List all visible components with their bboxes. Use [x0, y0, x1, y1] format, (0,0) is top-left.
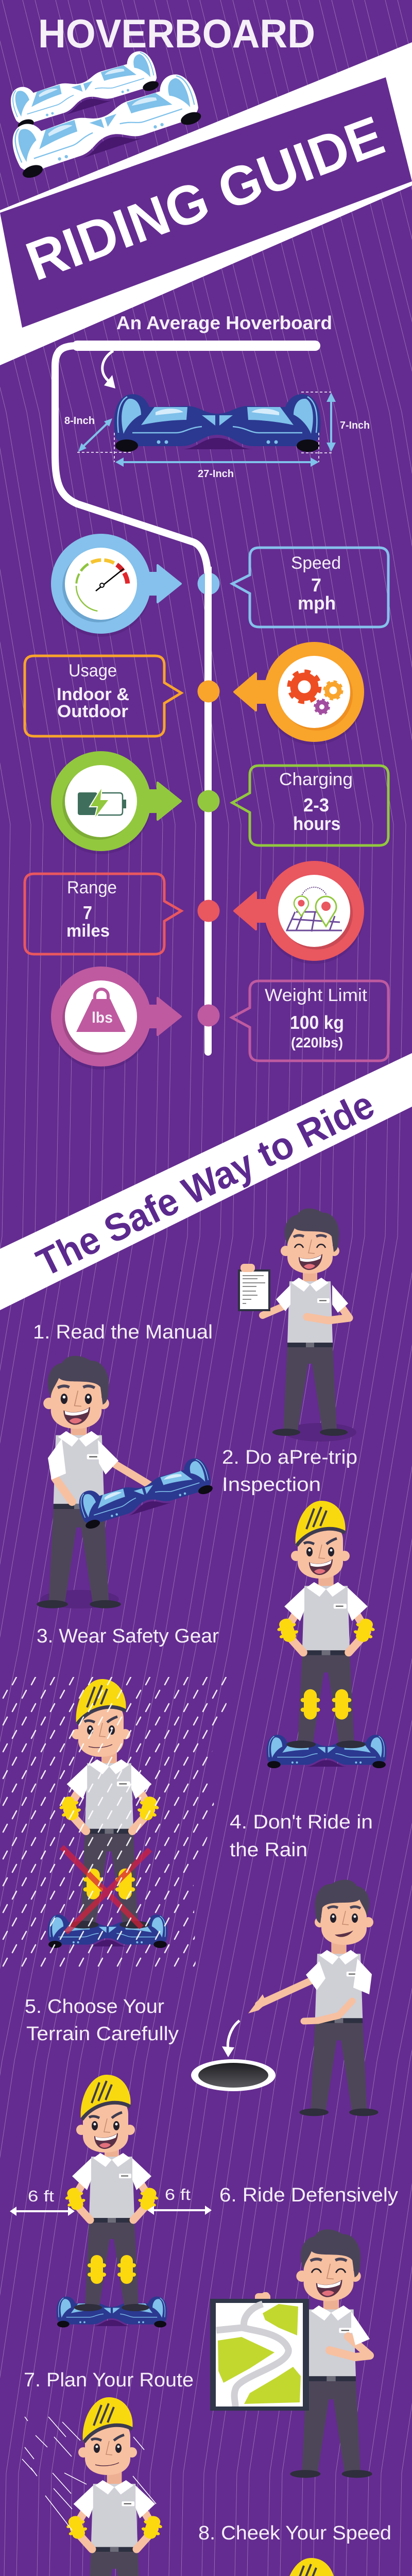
icon: map with pins	[287, 887, 342, 931]
step 4 label: the Rain	[230, 1839, 307, 1861]
hoverboard with dimensions	[64, 392, 370, 480]
label: 7-Inch: 7-Inch	[340, 420, 370, 431]
callout: charging: Charging	[279, 770, 353, 789]
rain	[0, 1677, 229, 1968]
callout: charging	[232, 766, 388, 845]
step 6: ride defensively	[10, 2075, 212, 2327]
icon: weight	[76, 989, 126, 1032]
callout: weight limit	[232, 981, 388, 1061]
step 5: choose your terrain	[191, 1879, 379, 2116]
heading: An Average Hoverboard: An Average Hoverboard	[116, 312, 332, 333]
step 7 label: 7. Plan Your Route	[24, 2369, 194, 2391]
icon: curved arrow	[222, 2021, 239, 2057]
callout: range: 7	[83, 902, 92, 923]
callout: speed: 7	[311, 574, 321, 596]
callout: usage: Indoor &	[57, 685, 129, 704]
panel: range	[25, 861, 364, 964]
icon: speedometer	[76, 560, 128, 611]
right distance arrow: 6 ft	[165, 2185, 191, 2204]
icon: red cross	[62, 1847, 150, 1933]
step 8 label: 8. Cheek Your Speed	[198, 2522, 391, 2544]
step 8: check your speed	[22, 2397, 169, 2576]
callout: range: miles	[66, 921, 110, 941]
callout: weight limit: Weight Limit	[265, 986, 368, 1005]
step 2 label: Inspection	[222, 1474, 321, 1496]
banner: The Safe Way to Ride: The Safe Way to Ride	[30, 1082, 381, 1284]
label: 27-Inch: 27-Inch	[198, 468, 234, 480]
title banner: Riding Guide: RIDING GUIDE	[18, 104, 392, 293]
title banner: Riding Guide	[0, 42, 412, 365]
icon: gears	[289, 671, 342, 714]
icon: pothole	[191, 2059, 276, 2091]
right distance arrow	[147, 2185, 212, 2215]
callout: range: Range	[67, 878, 117, 897]
step 6 label: 6. Ride Defensively	[219, 2184, 398, 2206]
callout: weight limit: (220lbs)	[291, 1035, 343, 1050]
panel: speed	[51, 534, 388, 637]
step 3: wear safety gear	[267, 1501, 386, 1768]
label: 8-Inch: 8-Inch	[64, 415, 95, 427]
callout: weight limit: 100 kg	[290, 1012, 344, 1033]
callout: charging: 2-3	[303, 794, 329, 816]
step 1: read the manual	[238, 1209, 356, 1442]
step 1 label: 1. Read the Manual	[33, 1321, 213, 1343]
icon: route map	[210, 2292, 309, 2411]
icon: battery	[78, 787, 126, 819]
callout: speed	[232, 548, 388, 627]
step 7: plan your route	[210, 2229, 372, 2478]
step 4 label: 4. Don't Ride in	[230, 1811, 373, 1833]
panel: usage	[25, 642, 364, 745]
icon: held hoverboard	[75, 1455, 214, 1531]
white timeline path	[55, 346, 315, 1052]
white hoverboards illustration	[6, 48, 204, 180]
panel: charging	[51, 751, 388, 854]
callout: charging: hours	[293, 813, 340, 834]
curved arrow to hoverboard	[102, 351, 115, 388]
callout: range	[25, 874, 181, 954]
step 4: do not ride in the rain	[0, 1677, 229, 1968]
title: Hoverboard: HOVERBOARD	[38, 11, 315, 56]
icon: manual clipboard	[238, 1264, 270, 1311]
callout: usage: Usage	[68, 661, 117, 681]
speed lines	[22, 2417, 156, 2530]
panel: weight limit	[51, 967, 388, 1070]
callout: speed: Speed	[291, 553, 341, 573]
step 4 label	[230, 1811, 373, 1861]
step 5 label: 5. Choose Your	[25, 1996, 164, 2018]
step 2 label	[222, 1447, 357, 1496]
step 2 label: 2. Do aPre-trip	[222, 1447, 357, 1468]
left distance arrow: 6 ft	[28, 2187, 54, 2205]
icon: weight: lbs	[92, 1009, 113, 1026]
left distance arrow	[10, 2187, 75, 2216]
step 2: pre-trip inspection	[37, 1356, 214, 1608]
callout: speed: mph	[298, 592, 336, 614]
step 3 label: 3. Wear Safety Gear	[37, 1625, 219, 1647]
step 9: practice	[257, 2558, 387, 2576]
callout: usage	[25, 656, 181, 736]
step 5 label: Terrain Carefully	[26, 2023, 179, 2045]
callout: usage: Outdoor	[57, 702, 128, 721]
step 5 label	[25, 1996, 179, 2045]
